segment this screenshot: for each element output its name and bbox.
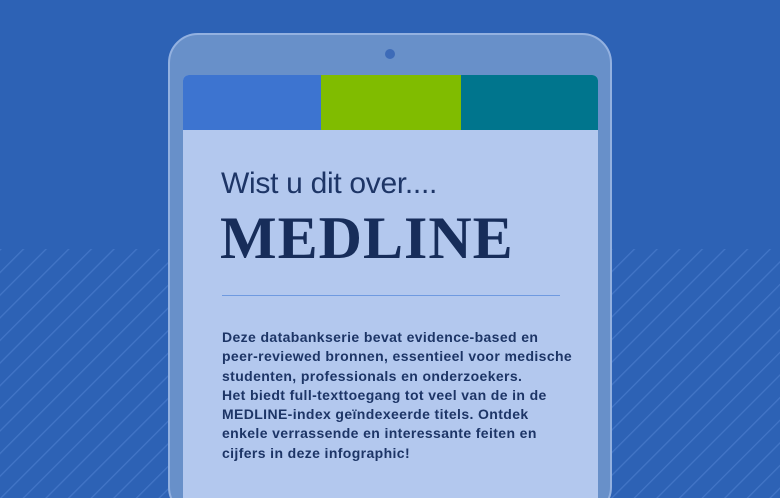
title: MEDLINE [220,205,514,271]
body text: Het biedt full-texttoegang tot veel van de in de [222,387,547,403]
subtitle: Wist u dit over.... [221,167,437,200]
body text: Deze databankserie bevat evidence-based en [222,329,538,345]
tablet device [168,33,612,498]
body text [222,329,572,461]
body text: MEDLINE-index geïndexeerde titels. Ontdek [222,406,529,422]
body text: studenten, professionals en onderzoekers. [222,368,522,384]
color bars [183,75,598,130]
background hatch pattern [0,249,780,498]
body text: enkele verrassende en interessante feiten en [222,425,537,441]
screen [183,75,598,498]
icon: camera [385,49,395,59]
body text: peer-reviewed bronnen, essentieel voor medische [222,348,572,364]
body text: cijfers in deze infographic! [222,445,410,461]
